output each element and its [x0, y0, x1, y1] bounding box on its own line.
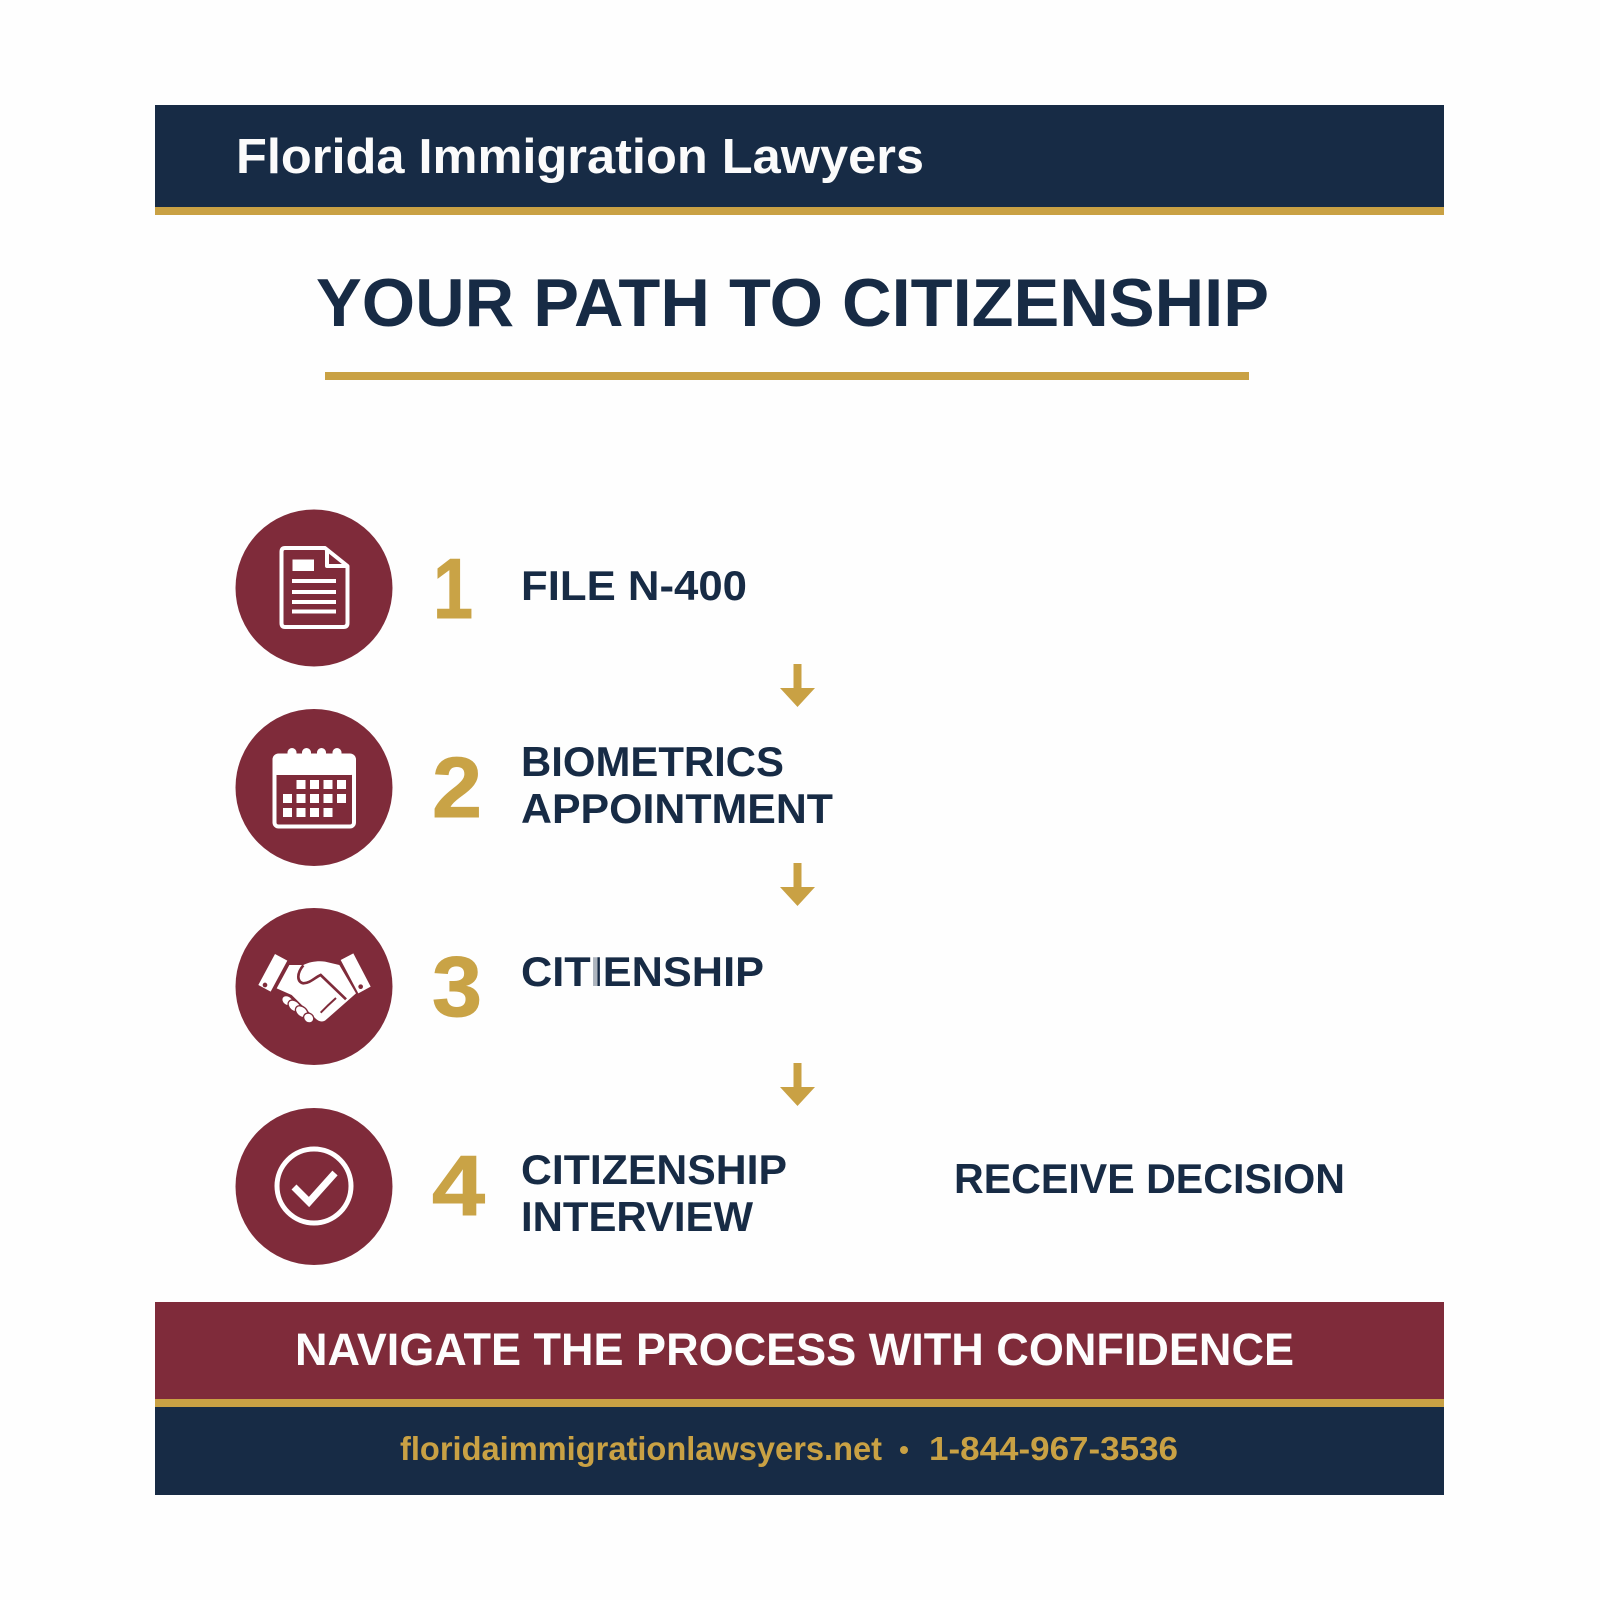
icon: calendar	[236, 709, 392, 866]
step label: file n-400: FILE N-400	[521, 562, 747, 609]
step number 1: 1	[433, 542, 473, 637]
step label: citizenship interview: INTERVIEW	[521, 1193, 753, 1240]
firm name: Florida Immigration Lawyers	[236, 130, 924, 184]
separator dot	[900, 1446, 908, 1454]
step 2	[236, 709, 833, 866]
step number 2: 2	[432, 741, 482, 836]
phone: 1-844-967-3536	[929, 1430, 1178, 1467]
step number 4: 4	[432, 1139, 485, 1234]
step label: citizenship interview	[521, 1146, 787, 1240]
step label: biometrics appointment	[521, 738, 833, 832]
step label: citienship: CITIENSHIP	[521, 948, 764, 995]
step label: biometrics appointment: BIOMETRICS	[521, 738, 784, 785]
step 4	[236, 1108, 787, 1265]
icon: handshake	[236, 908, 392, 1065]
gold divider	[155, 1399, 1444, 1407]
website: floridaimmigrationlawsyers.net	[400, 1430, 882, 1467]
arrow 1	[780, 664, 815, 707]
step label: citizenship interview: CITIZENSHIP	[521, 1146, 787, 1193]
icon: document	[236, 510, 392, 666]
header banner	[155, 105, 1444, 215]
step 3	[236, 908, 764, 1065]
title underline	[325, 372, 1249, 380]
confidence banner	[155, 1302, 1444, 1399]
step 1	[236, 510, 747, 666]
icon: check mark	[236, 1108, 392, 1265]
arrow 2	[780, 863, 815, 906]
step label: biometrics appointment: APPOINTMENT	[521, 785, 833, 832]
title: YOUR PATH TO CITIZENSHIP	[316, 265, 1269, 341]
final step label: receive decision: RECEIVE DECISION	[954, 1155, 1345, 1202]
contact footer	[155, 1407, 1444, 1495]
arrow 3	[780, 1063, 815, 1106]
step number 3: 3	[432, 940, 482, 1035]
banner text: NAVIGATE THE PROCESS WITH CONFIDENCE	[295, 1324, 1294, 1375]
